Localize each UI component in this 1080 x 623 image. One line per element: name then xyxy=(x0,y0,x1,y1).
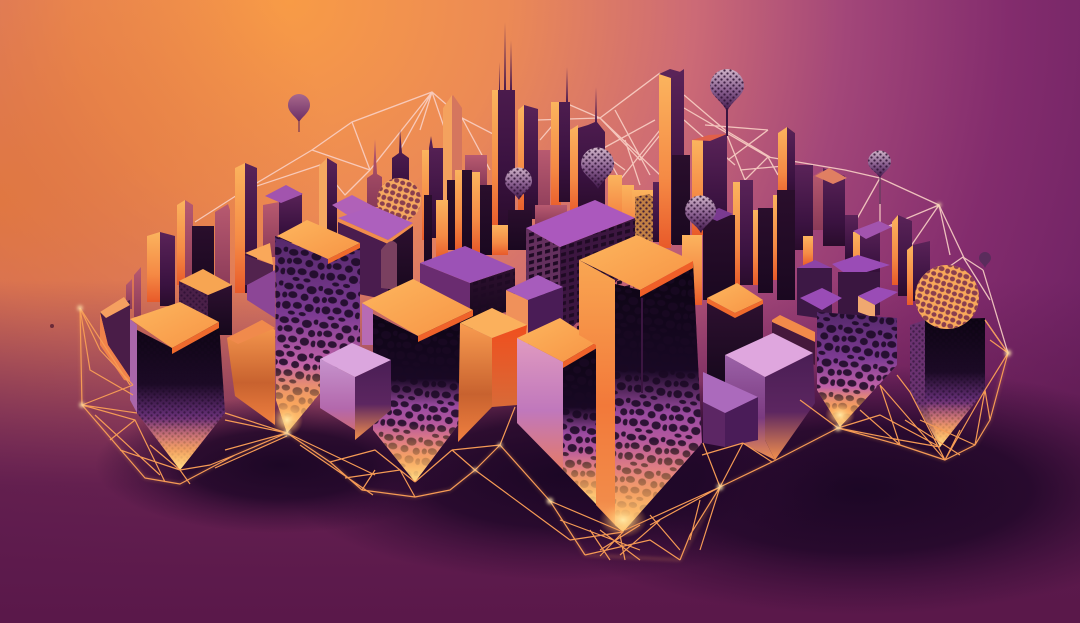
left hull block xyxy=(130,302,225,470)
right lattice hull xyxy=(817,312,897,428)
mid blocks: back row xyxy=(100,195,635,425)
right-back small orange block xyxy=(707,283,763,385)
low purple cube xyxy=(703,372,758,447)
bright network nodes xyxy=(78,203,1011,504)
orange block centre-left xyxy=(458,308,527,442)
centre lilac-front hull block xyxy=(517,318,597,505)
orange mid block xyxy=(227,320,275,425)
orange small-top strip and purple slab xyxy=(245,243,275,318)
balloon 3 xyxy=(505,168,532,200)
balloon 7 xyxy=(979,252,991,268)
purple slab left-centre xyxy=(420,246,515,320)
network: upper mesh xyxy=(195,73,1008,353)
purple rooftops cluster xyxy=(772,255,898,365)
balloon 1 xyxy=(288,94,310,132)
balloons xyxy=(288,69,991,268)
second hull block with lattice xyxy=(271,220,360,436)
small purple block xyxy=(332,195,373,218)
lilac cube left xyxy=(320,343,391,440)
network: lower mesh xyxy=(80,308,1008,560)
lattice sphere: back xyxy=(377,178,421,222)
skyline: left towers xyxy=(126,129,409,317)
right-most hull block xyxy=(910,318,985,447)
skyline: central towers xyxy=(422,22,660,265)
lilac cube right xyxy=(725,333,815,460)
purple slab centre xyxy=(526,200,635,340)
lattice sphere: front right xyxy=(915,265,979,329)
balloon 5 xyxy=(685,195,716,233)
back block with purple top xyxy=(338,206,413,300)
arches on back block xyxy=(381,241,397,290)
balloon 2 xyxy=(710,69,744,136)
small pink block xyxy=(506,275,563,345)
balloon 4 xyxy=(581,148,614,189)
skyline: tall orange tower and right towers xyxy=(659,69,930,305)
far-left wedge xyxy=(100,297,133,385)
network: glow under lines xyxy=(80,308,1008,560)
third hull block xyxy=(362,279,473,482)
ground shadow xyxy=(95,365,1080,615)
small orange-top block xyxy=(179,269,232,335)
small speck left xyxy=(50,324,54,328)
balloon 6 xyxy=(868,150,891,204)
main tall hull block xyxy=(579,235,702,538)
